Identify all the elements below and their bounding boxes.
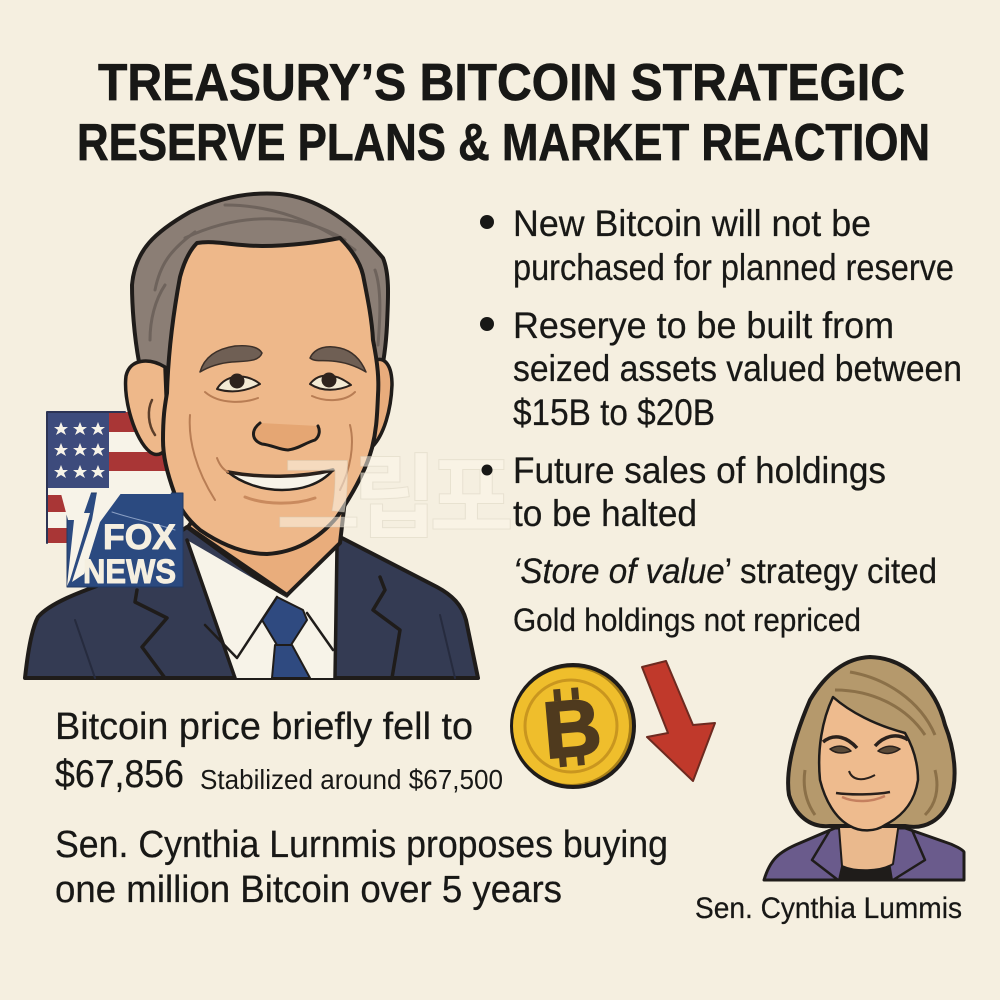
- jacket: [764, 828, 964, 880]
- proposal text: [55, 824, 668, 911]
- gold holdings line: Gold holdings not repriced: [513, 602, 861, 638]
- face lines: [190, 392, 355, 500]
- illustration: Sen. Lummis portrait: [764, 657, 964, 880]
- title: TREASURY’S BITCOIN STRATEGIC: [98, 54, 905, 112]
- neck: [188, 500, 345, 595]
- proposal text: Sen. Cynthia Lurnmis proposes buying: [55, 824, 668, 866]
- bullet 3: [482, 450, 886, 534]
- bullet 2: [480, 305, 962, 433]
- store of value line: ‘Store of value’ strategy cited: [513, 552, 937, 591]
- bullet 2: $15B to $20B: [513, 392, 715, 433]
- title: [77, 54, 930, 172]
- logo: Fox News: [60, 490, 183, 591]
- logo: Fox News: FOX: [103, 518, 177, 557]
- logo: Fox News: NEWS: [83, 553, 176, 591]
- suit jacket: [25, 527, 478, 678]
- bullet 2: seized assets valued between: [513, 348, 962, 389]
- bullet 2: Reserye to be built from: [513, 305, 894, 346]
- arrow: price down: [642, 661, 715, 781]
- ear left: [126, 361, 168, 454]
- bullet list: reserve plans: [276, 203, 962, 638]
- watermark: 그립포: [276, 448, 510, 550]
- eyes: [217, 372, 351, 391]
- icon: bitcoin coin: [512, 665, 634, 787]
- ear right: [372, 359, 392, 447]
- proposal text: one million Bitcoin over 5 years: [55, 869, 562, 911]
- eyebrows: [200, 346, 366, 372]
- icon: bitcoin coin: B: [539, 682, 605, 775]
- face: [163, 238, 378, 554]
- price text: Stabilized around $67,500: [200, 764, 503, 795]
- hair: [788, 657, 955, 827]
- necktie: [262, 597, 310, 678]
- nose: [253, 423, 319, 450]
- bullet 1: New Bitcoin will not be: [513, 203, 871, 244]
- bullet 1: purchased for planned reserve: [513, 247, 954, 288]
- face: [819, 697, 918, 830]
- hair: [132, 193, 388, 420]
- illustration: man portrait with flag and Fox News logo: [25, 193, 478, 678]
- caption: Sen. Cynthia Lummis: Sen. Cynthia Lummis: [695, 892, 962, 925]
- neck: [838, 815, 900, 870]
- lapels: [75, 540, 455, 678]
- bullet 1: [480, 203, 954, 288]
- price text: [55, 706, 503, 796]
- icon: American flag: [47, 412, 177, 543]
- price text: Bitcoin price briefly fell to: [55, 706, 473, 748]
- mouth: [228, 470, 333, 503]
- bullet 3: to be halted: [513, 493, 697, 534]
- shirt and collar: [187, 540, 337, 678]
- bullet 3: Future sales of holdings: [513, 450, 886, 491]
- price text: $67,856: [55, 753, 184, 796]
- facial features: [823, 736, 908, 801]
